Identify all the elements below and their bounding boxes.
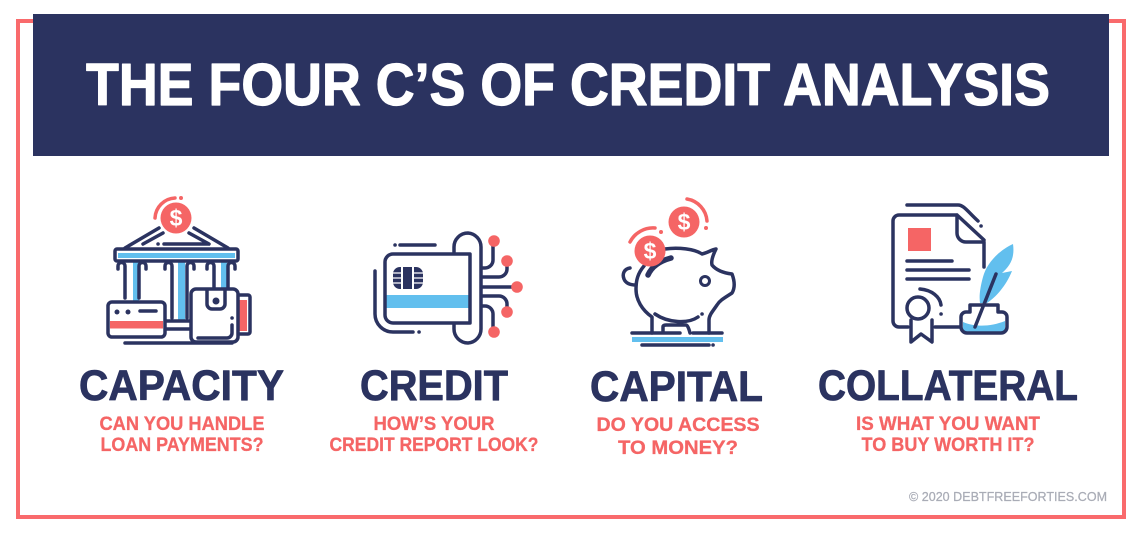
icon: piggy bank with coins: $ bbox=[678, 209, 691, 235]
text: credit question bbox=[330, 413, 538, 456]
text: collateral question: IS WHAT YOU WANT bbox=[856, 413, 1040, 435]
title banner bbox=[33, 14, 1109, 156]
heading: capacity: CAPACITY bbox=[79, 362, 284, 410]
title: THE FOUR C’S OF CREDIT ANALYSIS bbox=[86, 52, 1050, 118]
text: capital question: TO MONEY? bbox=[618, 437, 738, 459]
text: credit question: CREDIT REPORT LOOK? bbox=[330, 434, 538, 456]
text: capacity question: CAN YOU HANDLE bbox=[100, 413, 264, 435]
icon: credit card with circuit bbox=[375, 233, 523, 343]
icon: document with seal, quill and ink bbox=[893, 205, 1013, 342]
heading: collateral: COLLATERAL bbox=[818, 362, 1078, 410]
copyright: © 2020 DEBTFREEFORTIES.COM bbox=[909, 490, 1107, 504]
icon: bank with coin, card and wallet: $ bbox=[170, 205, 183, 231]
heading: credit: CREDIT bbox=[360, 362, 508, 410]
icon: bank with coin, card and wallet bbox=[108, 196, 250, 343]
text: credit question: HOW’S YOUR bbox=[374, 413, 494, 435]
panel: collateral bbox=[818, 205, 1078, 456]
icon: piggy bank with coins bbox=[623, 199, 734, 345]
text: capital question bbox=[596, 414, 760, 459]
text: capacity question: LOAN PAYMENTS? bbox=[100, 434, 264, 456]
text: capacity question bbox=[100, 413, 264, 456]
panel: capital bbox=[590, 199, 763, 459]
text: capital question: DO YOU ACCESS bbox=[596, 414, 760, 436]
text: collateral question: TO BUY WORTH IT? bbox=[862, 434, 1034, 456]
icon: piggy bank with coins: $ bbox=[644, 238, 657, 264]
panel: credit bbox=[330, 233, 538, 456]
panel: capacity bbox=[79, 196, 284, 456]
text: collateral question bbox=[856, 413, 1040, 456]
heading: capital: CAPITAL bbox=[590, 363, 763, 411]
